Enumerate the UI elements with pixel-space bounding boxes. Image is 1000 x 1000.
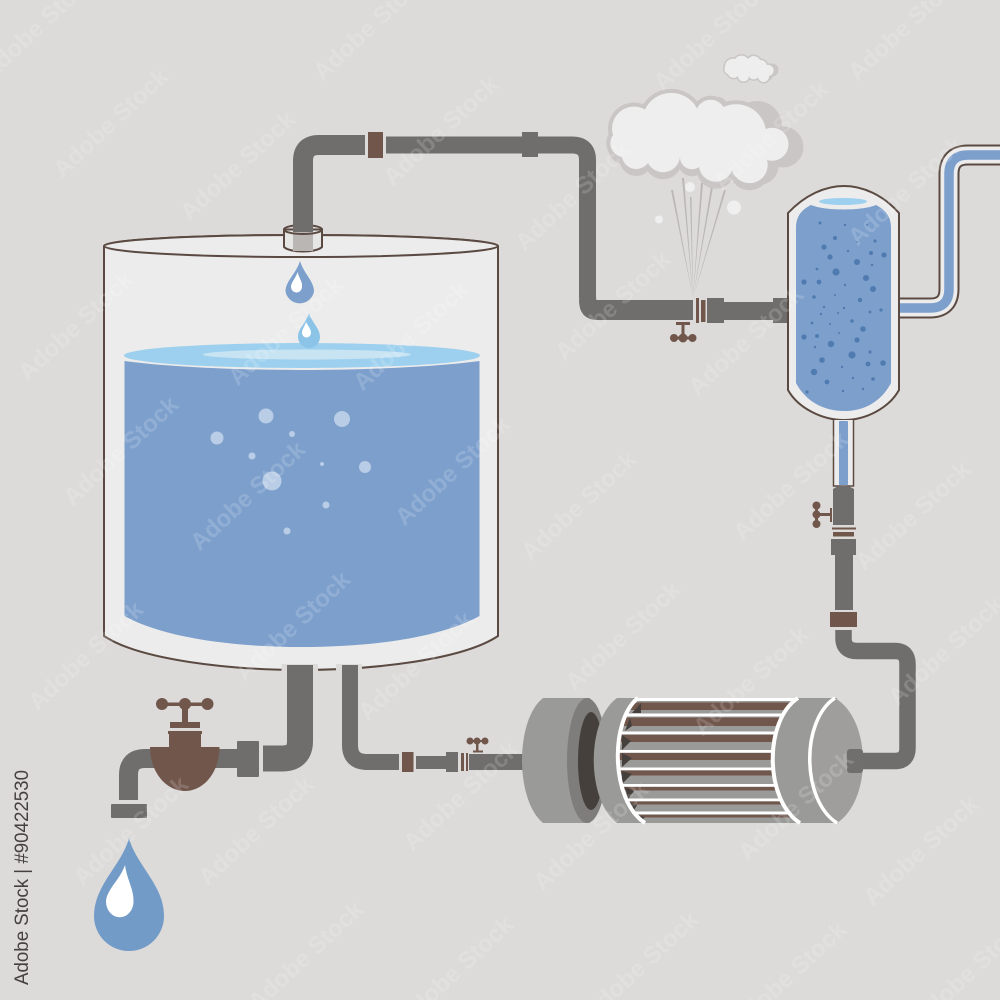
stock watermarks: Adobe Stock <box>550 246 676 366</box>
top supply pipe <box>303 132 693 320</box>
small cloud body <box>724 56 774 82</box>
stock watermarks: Adobe Stock <box>13 266 139 386</box>
stock watermarks: Adobe Stock <box>708 76 834 196</box>
tank drain pipe <box>263 665 300 758</box>
filter cap band <box>810 698 837 823</box>
water body <box>124 361 480 647</box>
filter outlet stub <box>847 749 863 773</box>
filter right band <box>773 698 800 823</box>
tank body <box>104 235 498 670</box>
stock watermarks: Adobe Stock <box>48 63 174 183</box>
vessel neck <box>834 420 854 486</box>
filter ring <box>567 698 607 823</box>
stock watermarks: Adobe Stock <box>390 411 516 531</box>
steam droplets <box>655 182 741 224</box>
stock watermarks: Adobe Stock <box>733 746 859 866</box>
panel: separator vessel <box>788 186 899 420</box>
filter end cap <box>810 698 863 823</box>
return pipe <box>830 486 908 761</box>
stock watermarks: Adobe Stock <box>683 281 809 401</box>
water surface <box>124 343 480 368</box>
stock watermarks: Adobe Stock <box>858 791 984 911</box>
vessel shell <box>788 186 899 420</box>
tank rim <box>104 235 498 257</box>
stock watermarks: Adobe Stock <box>68 771 194 891</box>
stock watermarks: Adobe Stock <box>348 276 474 396</box>
filter slats <box>610 698 800 823</box>
faucet body <box>150 698 220 791</box>
faucet pipe <box>215 749 238 768</box>
stock watermarks: Adobe Stock <box>223 271 349 391</box>
stock watermarks: Adobe Stock <box>230 566 356 686</box>
faucet assembly <box>111 665 300 818</box>
stock watermarks: Adobe Stock <box>398 736 524 856</box>
pipe collar brown <box>368 132 383 158</box>
stock watermarks: Adobe Stock <box>560 576 686 696</box>
stock watermarks: Adobe Stock <box>528 776 654 896</box>
blue outlet pipe <box>897 155 1000 308</box>
big water drop <box>94 838 164 951</box>
vessel bubbles <box>801 222 887 394</box>
stock watermarks: Adobe Stock <box>850 456 976 576</box>
rising bubbles <box>210 408 371 534</box>
filter left drum <box>522 698 590 823</box>
filter inlet pipe <box>350 665 524 772</box>
filter right sleeve <box>773 698 837 823</box>
inlet small valve <box>466 738 488 752</box>
vessel surface <box>819 198 867 205</box>
small cloud <box>724 56 778 82</box>
stock watermarks: Adobe Stock <box>516 446 642 566</box>
side valve <box>812 502 832 528</box>
spout tip <box>111 804 147 818</box>
filter left band <box>618 698 645 823</box>
stock watermarks: Adobe Stock <box>175 106 301 226</box>
stock watermarks: Adobe Stock <box>353 606 479 726</box>
faucet collar <box>237 741 259 777</box>
filter sleeve <box>594 698 645 823</box>
stock watermarks: Adobe Stock <box>510 136 636 256</box>
large steam cloud <box>610 93 804 188</box>
stock watermarks: Adobe Stock <box>185 436 311 556</box>
stock watermarks: Adobe Stock <box>843 131 969 251</box>
panel: filter cylinder <box>522 698 863 823</box>
vessel water <box>796 205 891 411</box>
small valve under pipe <box>670 322 696 342</box>
falling drop light <box>298 313 320 348</box>
tank outlet gaps <box>282 664 362 673</box>
panel: storage tank <box>104 225 498 670</box>
steam leak fitting <box>696 298 789 323</box>
steam jets <box>671 178 726 298</box>
faucet spout <box>128 758 155 800</box>
stock watermarks: Adobe Stock <box>728 426 854 546</box>
filter dark opening <box>578 712 604 810</box>
small cloud shadow <box>724 56 778 82</box>
cloud body <box>610 93 788 183</box>
stock watermarks: Adobe Stock <box>378 71 504 191</box>
cloud shadow <box>610 93 804 188</box>
inlet collar <box>284 225 322 252</box>
pipe collar grey <box>522 132 538 157</box>
stock watermarks: Adobe Stock <box>58 391 184 511</box>
falling drop dark <box>286 261 314 303</box>
stock watermarks: Adobe Stock <box>688 621 814 741</box>
stock watermarks: Adobe Stock <box>23 596 149 716</box>
stock watermarks: Adobe Stock <box>193 771 319 891</box>
stock id caption: Adobe Stock | #90422530 <box>12 770 33 985</box>
